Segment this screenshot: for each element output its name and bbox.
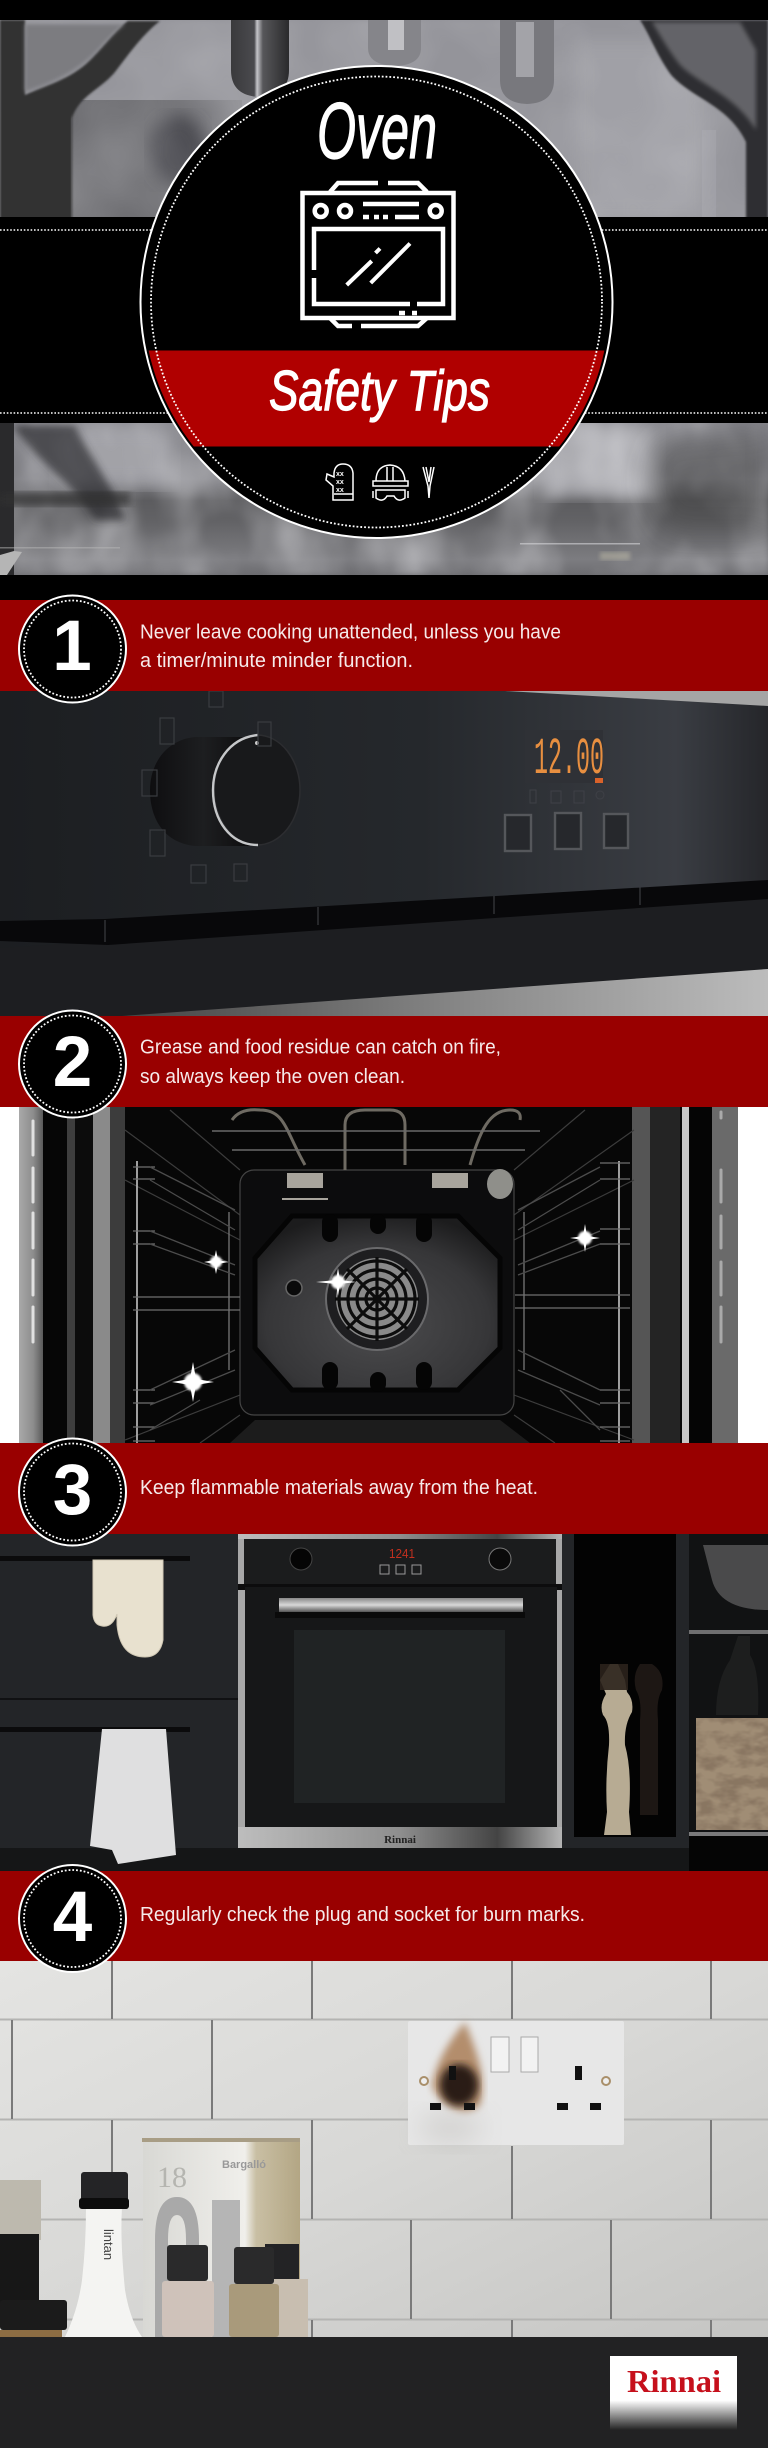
steel base [238,1827,562,1848]
dotted ring [151,76,602,528]
Rinnai logo: Rinnai [627,2363,721,2399]
photo: oven control panel [0,691,768,1016]
screws [420,2077,428,2085]
wall oven [238,1534,562,1848]
tip 1 text: a timer/minute minder function. [140,650,413,672]
top brackets [282,1169,513,1200]
number badge 2: 2 [53,1023,92,1102]
scorch marks [418,2022,483,2140]
tip 4 text: Regularly check the plug and socket for burn marks. [140,1904,585,1926]
tip 1 text: Never leave cooking unattended, unless you have [140,622,561,644]
number badge 2 [19,1010,126,1118]
number badge 3: 3 [53,1451,92,1530]
tip 4 banner [0,1865,768,1972]
digital clock display [530,738,604,804]
drawer divider [0,1698,238,1700]
dark pepper mill [635,1664,663,1815]
tip 2 text: Grease and food residue can catch on fire, [140,1036,501,1058]
oven door frame right [632,1107,738,1443]
dial markers [142,691,271,883]
side racks [133,1161,630,1443]
tip 2 text [140,1036,501,1088]
cavity inner lines [125,1110,634,1443]
tip 1 text [140,622,561,672]
badge circle [140,66,612,538]
icon: oven mitt [326,464,353,500]
control panel [244,1539,556,1584]
vent slot [0,880,768,945]
title: Safety Tips: Safety Tips [269,359,490,423]
cavity floor [230,1420,530,1443]
photo: built-in oven in black kitchen [0,1534,768,1871]
number badge 4 [19,1865,126,1972]
switches [491,2037,509,2072]
light pepper mill [600,1664,632,1835]
oil tin [142,2138,300,2337]
wall oven: Rinnai [384,1834,416,1846]
plate dents [322,1214,432,1392]
oven mitt [93,1560,163,1657]
door handle [279,1598,523,1612]
icon: oven mitt: xx [336,471,344,478]
fan back plate [255,1216,500,1390]
niche [574,1534,676,1837]
tip 1 banner [0,596,768,702]
lower steel body [122,969,768,1016]
number badge 1 [19,596,126,702]
lower door plate [310,899,768,1002]
oil tin: 18 [157,2161,187,2194]
black band with dotted lines [0,217,768,423]
sparkles [172,1224,600,1402]
title: Oven: Oven [317,86,437,175]
photo: oven control panel: 12.00 [534,730,604,789]
icon: oven mitt: xx [336,487,344,494]
number badge 1: 1 [52,607,92,686]
icon: helmet and goggles [373,465,408,500]
Rinnai logo [610,2356,737,2430]
oil tin: Bargalló [222,2159,266,2171]
oven back rounded panel [240,1170,514,1415]
dark jar [0,2180,67,2337]
footer bar [0,2337,768,2448]
door [238,1584,562,1590]
number badge 4: 4 [53,1878,93,1957]
icon: oven mitt: xx [336,479,344,486]
steel trim top right [505,691,768,706]
tip 2 banner [0,1010,768,1118]
rails [0,1556,190,1732]
icon: oven [302,183,454,326]
hero photo: smoky oven interior [0,20,768,575]
number badge 3 [19,1438,126,1546]
wall oven: 1241 [389,1546,415,1561]
photo: tiled wall with burnt socket [0,1961,768,2337]
frame slots [33,1112,721,1342]
oven door frame left [19,1107,125,1443]
tea towel [90,1729,176,1864]
touch buttons [505,813,628,851]
red ribbon [140,350,613,446]
icon: tongs [423,467,434,498]
tip 2 text: so always keep the oven clean. [140,1066,405,1088]
right shelf [689,1534,768,1871]
top heating element [212,1110,540,1170]
hole [286,1280,302,1296]
photo: oven interior [0,1107,768,1443]
fan [326,1248,428,1350]
spice jars [162,2244,308,2337]
oven knob [150,735,300,846]
tip 3 banner [0,1438,768,1546]
title badge [140,66,613,538]
white bottle [65,2172,142,2337]
socket holes [430,2066,601,2110]
white bottle: lintan [101,2229,116,2260]
plinth [0,1848,690,1871]
tile grout [0,1961,768,2337]
burnt socket [408,2021,624,2145]
tip 3 text: Keep flammable materials away from the heat. [140,1477,538,1499]
